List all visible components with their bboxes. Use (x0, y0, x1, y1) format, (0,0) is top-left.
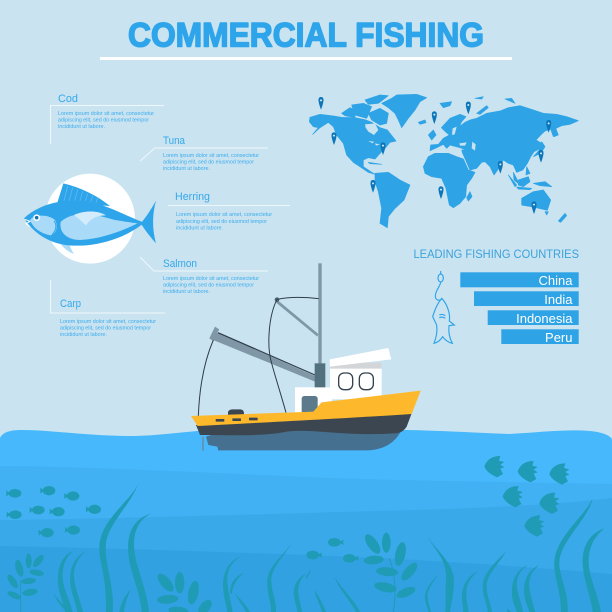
label: Salmon: incididunt ut labore. (163, 289, 210, 295)
heading: leading fishing countries: LEADING FISHING COUNTRIES (414, 247, 579, 261)
map: inland water (365, 123, 476, 151)
map: location pins (318, 97, 551, 214)
map: pin centres (320, 99, 550, 206)
label: Herring: adipiscing elit, sed do eiusmod tempor (176, 219, 267, 225)
seaweed: right bed (306, 498, 604, 612)
boat: portholes (216, 418, 258, 422)
label: Salmon: Lorem ipsum dolor sit amet, consectetur (163, 276, 259, 282)
label: Cod (50, 93, 164, 144)
label: Tuna: Lorem ipsum dolor sit amet, consectetur (163, 153, 259, 159)
label: Herring: incididunt ut labore. (176, 226, 223, 232)
label: Cod: Cod (58, 93, 78, 105)
school of small fish: left (6, 486, 101, 537)
sea (0, 430, 612, 612)
school of small fish: centre right (306, 538, 358, 563)
label: Cod: Lorem ipsum dolor sit amet, consectetur (58, 111, 154, 117)
map: continents (309, 94, 578, 228)
label: Carp (50, 280, 165, 338)
title: COMMERCIAL FISHING (128, 16, 484, 54)
label: Tuna: incididunt ut labore. (163, 166, 210, 172)
bar: Indonesia: Indonesia (516, 311, 573, 326)
boat: deck hatch (228, 409, 244, 415)
school of angelfish (484, 456, 569, 537)
label: Cod: incididunt ut labore. (58, 124, 105, 130)
world map (309, 94, 578, 228)
bar: Peru: Peru (545, 330, 572, 345)
boat: submerged hull (206, 430, 402, 450)
label: Carp: incididunt ut labore. (60, 332, 107, 338)
boat: yellow hull (191, 391, 421, 426)
icon: tuna fish in white circle (24, 174, 156, 264)
label: Herring: Lorem ipsum dolor sit amet, consectetur (176, 212, 272, 218)
label: Tuna: Tuna (163, 135, 186, 147)
panel: fish species (50, 93, 290, 338)
title underline (100, 57, 512, 60)
leaf plant: centre left (155, 571, 214, 612)
label: Salmon: Salmon (163, 258, 197, 270)
label: Tuna: adipiscing elit, sed do eiusmod tempor (163, 160, 254, 166)
boat (191, 263, 421, 451)
label: Herring: Herring (175, 191, 210, 203)
bar: China: China (539, 273, 573, 288)
bar: India: India (544, 292, 573, 307)
label: Salmon: adipiscing elit, sed do eiusmod tempor (163, 282, 254, 288)
label: Cod: adipiscing elit, sed do eiusmod tempor (58, 118, 149, 124)
seaweed: left bed (5, 483, 306, 612)
label: Tuna (140, 135, 268, 172)
boat: cabin (295, 348, 391, 414)
label: Carp: Lorem ipsum dolor sit amet, consectetur (60, 319, 156, 325)
label: Carp: Carp (60, 298, 81, 310)
label: Carp: adipiscing elit, sed do eiusmod tempor (60, 326, 151, 332)
bar list: countries (460, 272, 579, 345)
boat: propeller (201, 437, 205, 451)
leaf plant: centre right (362, 532, 420, 612)
boat: dark hull band (196, 413, 412, 435)
label: Salmon (140, 257, 268, 295)
label: Herring (168, 191, 290, 232)
leaf plant: far left (5, 553, 46, 612)
boat: rigging poles (198, 263, 322, 416)
icon: fish on hook (433, 271, 454, 343)
